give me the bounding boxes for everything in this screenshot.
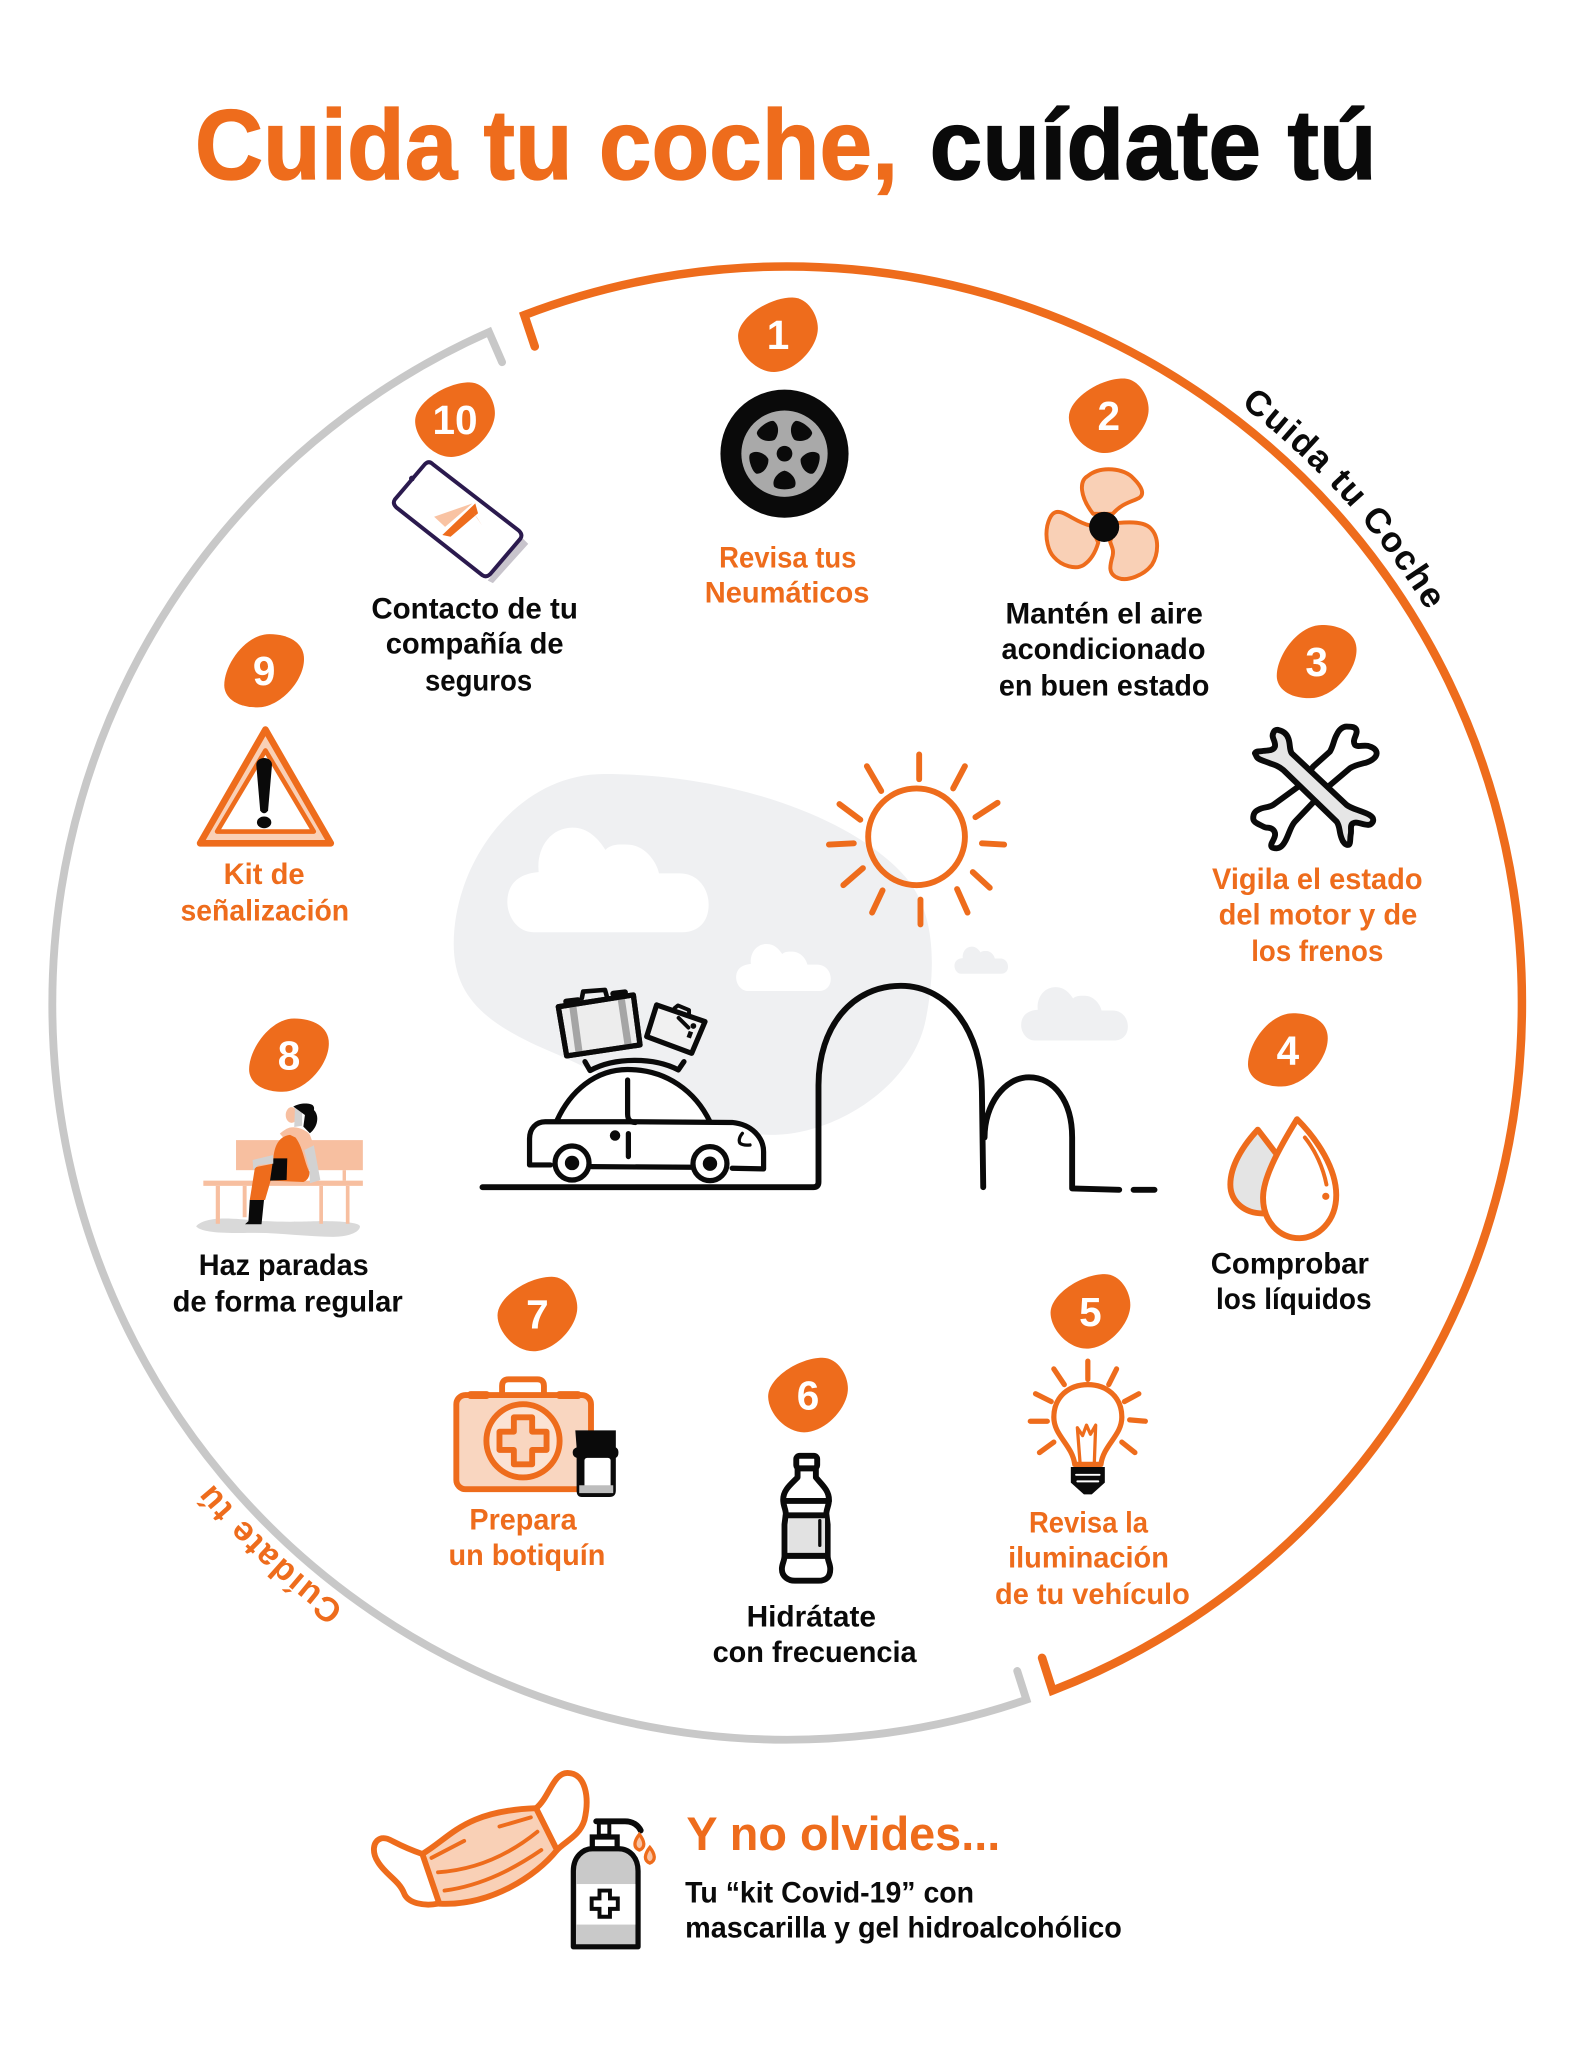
label 5 — [995, 1506, 1190, 1611]
badge 5 — [1051, 1274, 1130, 1349]
badge 6 — [768, 1358, 848, 1432]
badge 4 — [1248, 1013, 1328, 1086]
footer heading: Y no olvides... — [686, 1807, 1000, 1860]
step 9: señalización — [180, 634, 349, 927]
label 3 — [1212, 863, 1423, 968]
badge 8: 8 — [278, 1032, 300, 1078]
step 10: compañía de seguros — [371, 382, 578, 697]
label 6 — [713, 1600, 917, 1669]
badge 3: 3 — [1305, 639, 1328, 685]
label 4: Comprobar — [1211, 1247, 1369, 1280]
badge 3 — [1277, 625, 1357, 698]
badge 1 — [738, 297, 818, 372]
icon: crossed wrenches — [1253, 727, 1377, 848]
label 5: de tu vehículo — [995, 1578, 1190, 1611]
badge 2: 2 — [1097, 393, 1120, 439]
label 3: los frenos — [1251, 935, 1383, 968]
step 2: aire acondicionado — [999, 379, 1209, 703]
label 10: seguros — [425, 664, 532, 697]
step 8: paradas — [173, 1019, 403, 1318]
label 4 — [1211, 1247, 1372, 1316]
clouds — [507, 828, 1128, 1040]
icon: face mask — [374, 1773, 587, 1905]
title: Cuida tu coche, — [195, 90, 898, 201]
badge 5: 5 — [1079, 1289, 1102, 1335]
sun — [829, 754, 1004, 924]
step 5: iluminación — [995, 1274, 1190, 1611]
step 7: botiquín — [448, 1277, 618, 1572]
label 6: con frecuencia — [713, 1636, 917, 1669]
icon: person resting on a bench — [196, 1103, 363, 1237]
badge 8 — [249, 1019, 329, 1092]
badge 7 — [498, 1277, 577, 1351]
icon: water bottle — [782, 1456, 830, 1581]
badge 7: 7 — [526, 1291, 549, 1337]
ring: cuídate tú arc — [52, 332, 1026, 1740]
icon: warning triangle — [200, 730, 331, 843]
badge 4: 4 — [1277, 1027, 1300, 1073]
icon: smartphone — [394, 462, 528, 583]
label 2: en buen estado — [999, 670, 1209, 703]
label 2 — [999, 598, 1209, 703]
footer text — [685, 1876, 1122, 1945]
label 10: compañía de — [386, 628, 564, 661]
icon: tyre — [720, 390, 849, 518]
label 7: un botiquín — [448, 1539, 605, 1572]
footer: y no olvides — [374, 1773, 1122, 1947]
footer text: Tu “kit Covid-19” con — [685, 1876, 974, 1909]
label 9: Kit de — [224, 858, 305, 891]
title: cuídate tú — [930, 90, 1377, 201]
label 10 — [371, 592, 578, 697]
label 1: Revisa tus — [719, 541, 856, 574]
badge 2 — [1069, 379, 1149, 453]
label 5: iluminación — [1008, 1542, 1169, 1575]
label 1 — [705, 541, 869, 610]
winding road — [482, 986, 1155, 1190]
car — [530, 1060, 764, 1181]
icon: drops — [1230, 1119, 1336, 1238]
footer text: mascarilla y gel hidroalcohólico — [685, 1912, 1122, 1945]
luggage — [558, 990, 705, 1056]
label 8: Haz paradas — [199, 1249, 369, 1282]
label 2: acondicionado — [1002, 633, 1206, 666]
label 1: Neumáticos — [705, 577, 869, 610]
ring label: Cuídate tú: Cuídate tú — [196, 1485, 339, 1622]
central illustration: road trip scene — [454, 754, 1155, 1190]
label 6: Hidrátate — [747, 1600, 876, 1633]
label 5: Revisa la — [1029, 1506, 1148, 1539]
label 9: señalización — [180, 894, 349, 927]
badge 9: 9 — [253, 648, 275, 694]
badge 1: 1 — [767, 312, 789, 358]
title — [195, 90, 1377, 201]
badge 10 — [415, 382, 495, 457]
ring label: Cuida tu Coche: Cuida tu Coche — [1246, 390, 1440, 608]
grey background blob — [454, 774, 932, 1135]
icon: hand sanitizer — [573, 1821, 654, 1947]
icon: light bulb — [1030, 1361, 1145, 1494]
step 6: hidratación — [713, 1358, 917, 1669]
icon: fan — [1046, 469, 1157, 579]
icon: first aid kit — [456, 1379, 618, 1497]
label 2: Mantén el aire — [1005, 598, 1203, 631]
badge 9 — [224, 634, 304, 707]
badge 10: 10 — [432, 397, 478, 443]
step 1: neumáticos — [705, 297, 869, 610]
label 10: Contacto de tu — [371, 592, 578, 625]
step 3: motor y frenos — [1212, 625, 1423, 968]
step 4: líquidos — [1211, 1013, 1372, 1316]
label 8 — [173, 1249, 403, 1318]
label 3: Vigila el estado — [1212, 863, 1423, 896]
label 9 — [180, 858, 349, 927]
label 7 — [448, 1504, 605, 1572]
label 3: del motor y de — [1219, 898, 1417, 931]
badge 6: 6 — [797, 1372, 819, 1418]
label 4: los líquidos — [1216, 1283, 1372, 1316]
ring: cuida tu coche arc — [524, 266, 1522, 1691]
label 8: de forma regular — [173, 1285, 403, 1318]
label 7: Prepara — [469, 1504, 577, 1537]
